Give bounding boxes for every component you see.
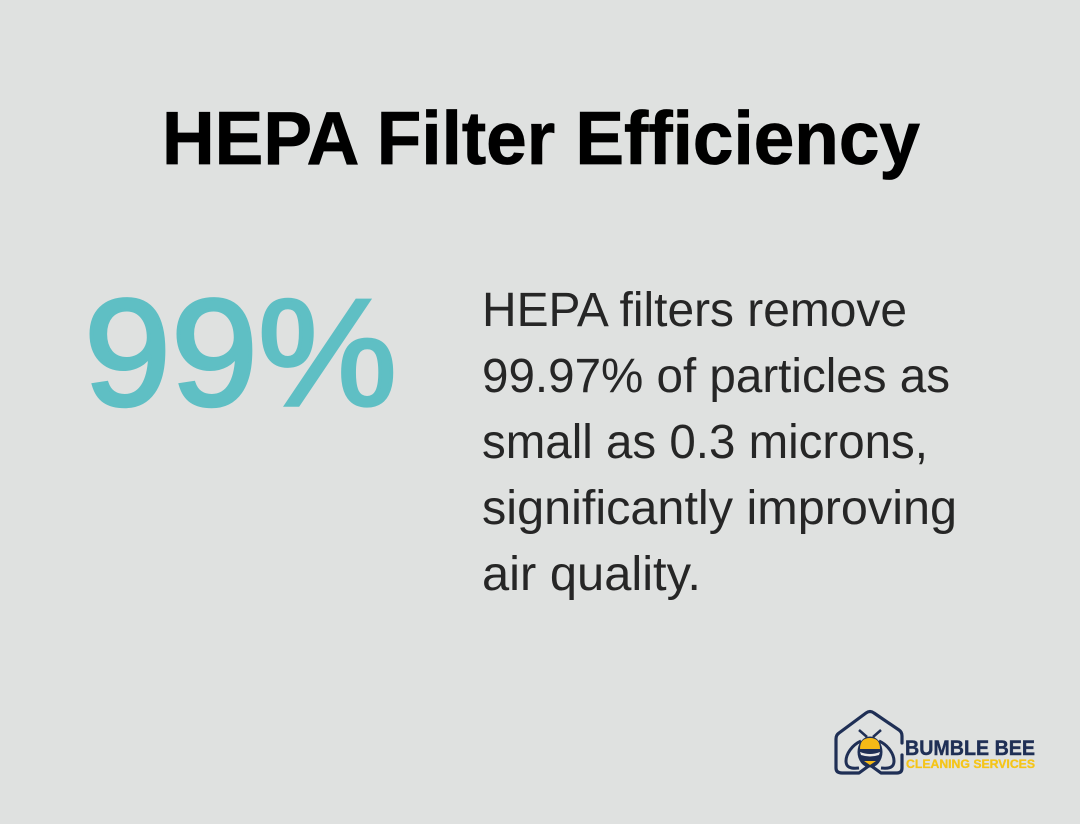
description text: HEPA filters remove: [482, 284, 907, 337]
big stat: 99%: 99%: [84, 268, 397, 438]
description text: 99.97% of particles as: [482, 350, 950, 403]
icon: house with bee: [836, 712, 902, 773]
description text: [482, 284, 957, 601]
description text: small as 0.3 microns,: [482, 416, 928, 469]
description text: significantly improving: [482, 482, 957, 535]
logo tagline: CLEANING SERVICES: [906, 757, 1035, 771]
logo name: BUMBLE BEE: [905, 737, 1035, 760]
logo: Bumble Bee Cleaning Services: [836, 712, 1035, 773]
description text: air quality.: [482, 548, 701, 601]
title: HEPA Filter Efficiency: [162, 96, 920, 180]
